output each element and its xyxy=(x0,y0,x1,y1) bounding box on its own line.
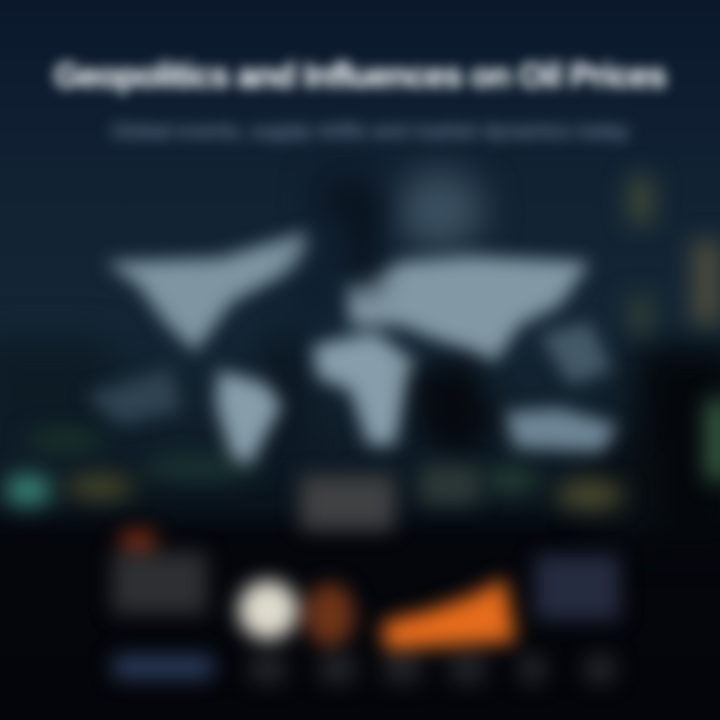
map: South America xyxy=(216,370,282,465)
map: Australia xyxy=(502,408,618,452)
map: North America xyxy=(105,232,312,352)
map: South Asia xyxy=(540,322,612,385)
icon: flame xyxy=(118,530,158,550)
map: Europe and Asia xyxy=(345,256,590,362)
panel: centre cards xyxy=(300,465,480,530)
panel: left stat xyxy=(112,552,207,614)
map: Central America faint xyxy=(85,368,182,425)
chart: orange area xyxy=(382,578,516,650)
icon: orange circle xyxy=(305,583,355,647)
title: Geopolitics and Influences on Oil Prices xyxy=(54,57,666,95)
chart labels row xyxy=(250,655,615,683)
subtitle: Global events, supply shifts and market dynamics today xyxy=(111,120,629,143)
panel: left label xyxy=(113,655,213,679)
map: Africa xyxy=(312,332,415,445)
panel: right stat xyxy=(535,555,620,620)
icon: white circle xyxy=(238,580,298,640)
